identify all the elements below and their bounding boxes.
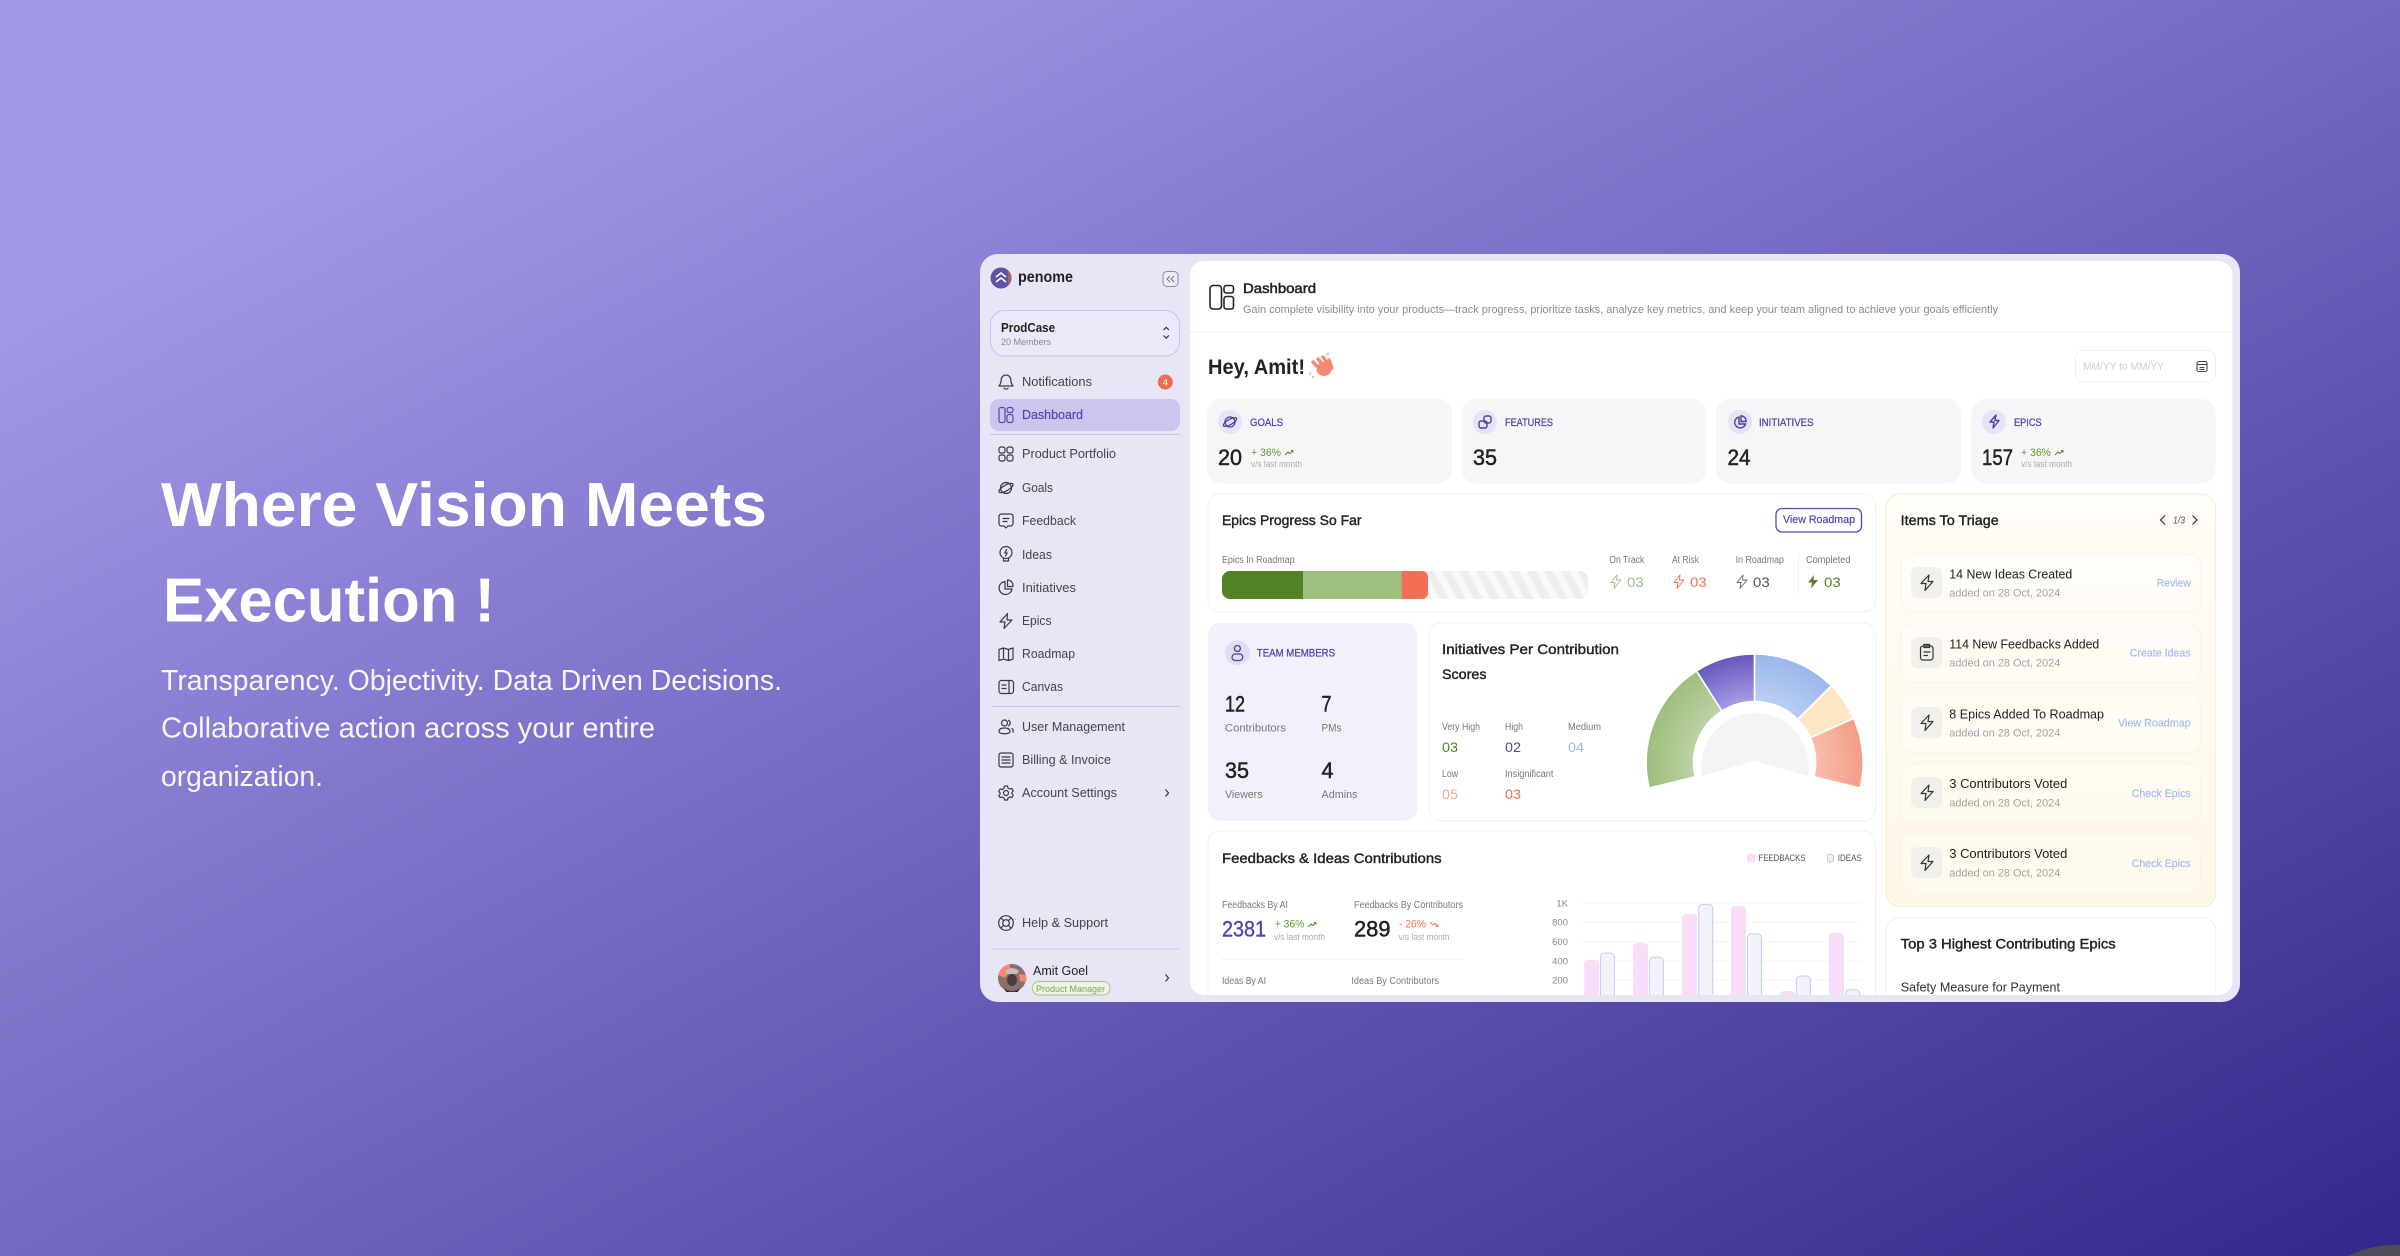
stat card: goals: GOALS bbox=[1250, 417, 1283, 429]
status: in roadmap: 03 bbox=[1753, 574, 1770, 590]
tagline: Collaborative action across your entire bbox=[161, 713, 655, 745]
pagination: 1/3 bbox=[2173, 516, 2185, 526]
y axis: 600 bbox=[1552, 937, 1568, 948]
metric: feedbacks by ai: v/s last month bbox=[1274, 932, 1325, 942]
stat: admins: Admins bbox=[1322, 789, 1358, 801]
tagline: Transparency. Objectivity. Data Driven Decisions. bbox=[161, 665, 782, 697]
legend: medium bbox=[1568, 722, 1600, 752]
nav item: notifications: Notifications bbox=[1022, 374, 1092, 389]
stat: contributors: Contributors bbox=[1225, 723, 1287, 735]
triage item: contributors voted: added on 28 Oct, 2024 bbox=[1949, 798, 2060, 810]
metric: feedbacks by contributors: Feedbacks By Contributors bbox=[1354, 900, 1463, 911]
status: in roadmap bbox=[1736, 555, 1784, 590]
stat: contributors: 12 bbox=[1225, 692, 1245, 717]
stat card: goals: 20 bbox=[1218, 445, 1242, 470]
metric: feedbacks by contributors bbox=[1354, 900, 1463, 942]
panel: team members bbox=[1208, 623, 1417, 821]
user profile: Amit Goel bbox=[1033, 963, 1088, 978]
y axis bbox=[1552, 898, 1862, 986]
triage item: new ideas: Review bbox=[2157, 578, 2191, 590]
stat card: goals: v/s last month bbox=[1251, 459, 1302, 469]
nav item: goals: Goals bbox=[1022, 480, 1053, 495]
stat: pms bbox=[1322, 696, 1342, 732]
panel: feedbacks and ideas bbox=[1208, 830, 1876, 995]
status: at risk: At Risk bbox=[1672, 555, 1700, 566]
status: on track bbox=[1609, 555, 1645, 590]
window frame bbox=[980, 254, 2240, 1002]
greeting: Hey, Amit! bbox=[1208, 356, 1305, 379]
triage item: contributors voted: Check Epics bbox=[2132, 788, 2191, 800]
metric: feedbacks by ai: 2381 bbox=[1222, 917, 1266, 942]
nav item: account settings: Account Settings bbox=[1022, 785, 1117, 800]
nav item: notifications: 4 bbox=[1163, 378, 1168, 388]
stat: viewers bbox=[1225, 762, 1262, 798]
triage item: new feedbacks: 114 New Feedbacks Added bbox=[1949, 637, 2099, 651]
headline bbox=[161, 471, 767, 636]
stat card: epics: 157 bbox=[1982, 445, 2013, 470]
triage item: contributors voted second: 3 Contributors Voted bbox=[1949, 847, 2067, 861]
triage item: contributors voted second: Check Epics bbox=[2132, 858, 2191, 870]
triage item: new ideas bbox=[1901, 554, 2201, 612]
status: at risk bbox=[1672, 555, 1707, 590]
panel: feedbacks and ideas: Feedbacks & Ideas Contributions bbox=[1222, 850, 1442, 866]
panel: items to triage: Items To Triage bbox=[1901, 512, 1999, 528]
stat card: epics: EPICS bbox=[2014, 417, 2042, 429]
legend: low: 05 bbox=[1442, 786, 1458, 802]
nav item: canvas bbox=[999, 679, 1063, 694]
panel: items to triage bbox=[1886, 494, 2216, 907]
icon: features bbox=[1473, 410, 1497, 434]
chart legend: IDEAS bbox=[1838, 853, 1862, 864]
legend: high: High bbox=[1505, 722, 1523, 733]
nav item: canvas: Canvas bbox=[1022, 679, 1063, 694]
nav item: help and support: Help & Support bbox=[1022, 915, 1108, 930]
status: on track: On Track bbox=[1609, 555, 1645, 566]
panel: top contributing epics: Top 3 Highest Contributing Epics bbox=[1901, 935, 2116, 951]
icon: waving hand bbox=[1310, 353, 1332, 378]
icon: goals bbox=[1218, 410, 1242, 434]
legend: very high: 03 bbox=[1442, 739, 1458, 755]
metric: feedbacks by contributors: v/s last month bbox=[1398, 932, 1450, 942]
progress bar bbox=[1222, 571, 1588, 599]
panel: top contributing epics bbox=[1886, 918, 2216, 1018]
stat: contributors bbox=[1226, 696, 1286, 732]
date range picker: MM/YY to MM/YY bbox=[2083, 361, 2165, 373]
panel heading: Initiatives Per Contribution bbox=[1442, 641, 1619, 657]
legend: low: Low bbox=[1442, 769, 1459, 780]
metric: ideas by ai: Ideas By AI bbox=[1222, 976, 1266, 987]
feedback bars bbox=[1584, 906, 1844, 1026]
icon: initiatives bbox=[1728, 410, 1752, 434]
icon: penome logo bbox=[990, 268, 1012, 288]
nav item: product portfolio: Product Portfolio bbox=[1022, 446, 1116, 461]
legend: very high bbox=[1442, 722, 1480, 752]
app window bbox=[980, 254, 2240, 1026]
nav item: initiatives: Initiatives bbox=[1022, 580, 1076, 595]
metric: feedbacks by contributors: - 26% bbox=[1399, 919, 1426, 931]
icon: calendar bbox=[2197, 362, 2207, 372]
user profile: Product Manager bbox=[1036, 984, 1105, 995]
main panel bbox=[1190, 261, 2233, 1026]
y axis: 1K bbox=[1556, 898, 1569, 910]
corner decoration bbox=[2348, 1245, 2400, 1256]
stat card: features bbox=[1462, 399, 1706, 484]
nav item: account settings bbox=[999, 785, 1168, 800]
legend: insignificant: Insignificant bbox=[1505, 769, 1554, 780]
workspace selector bbox=[990, 310, 1180, 356]
metric: feedbacks by ai: Feedbacks By AI bbox=[1222, 900, 1288, 911]
y axis: 400 bbox=[1552, 956, 1568, 968]
bar chart bbox=[1552, 898, 1862, 1026]
panel: initiatives per contribution bbox=[1429, 623, 1876, 821]
avatar bbox=[998, 964, 1026, 992]
triage item: epics added: 8 Epics Added To Roadmap bbox=[1949, 707, 2104, 721]
triage item: epics added: added on 28 Oct, 2024 bbox=[1949, 728, 2060, 740]
stat card: initiatives bbox=[1716, 399, 1961, 484]
headline: Where Vision Meets bbox=[161, 471, 767, 540]
nav item: roadmap: Roadmap bbox=[1022, 646, 1075, 661]
triage item: new ideas: 14 New Ideas Created bbox=[1949, 567, 2072, 581]
nav item: epics: Epics bbox=[1022, 613, 1052, 628]
stat: pms: 7 bbox=[1322, 692, 1332, 717]
chart legend: FEEDBACKS bbox=[1758, 853, 1806, 864]
legend: insignificant bbox=[1506, 770, 1554, 799]
triage item: contributors voted: 3 Contributors Voted bbox=[1949, 777, 2067, 791]
stat card: goals: + 36% bbox=[1251, 447, 1281, 459]
panel: epics progress: Epics Progress So Far bbox=[1222, 512, 1362, 528]
view roadmap button: View Roadmap bbox=[1783, 514, 1855, 526]
date range picker bbox=[2076, 350, 2216, 382]
legend: high bbox=[1506, 722, 1522, 752]
status: on track: 03 bbox=[1627, 574, 1644, 590]
brand name: penome bbox=[1018, 269, 1073, 286]
metric: ideas by contributors: Ideas By Contributors bbox=[1351, 976, 1439, 987]
stat card: epics: v/s last month bbox=[2021, 459, 2072, 469]
legend: insignificant: 03 bbox=[1505, 786, 1521, 802]
triage item: contributors voted second: added on 28 Oct, 2024 bbox=[1949, 868, 2060, 880]
infographic canvas bbox=[161, 254, 2400, 1256]
stat card: features: FEATURES bbox=[1505, 417, 1553, 429]
icon: epics bbox=[1982, 410, 2006, 434]
tagline bbox=[161, 665, 782, 793]
stat card: epics: + 36% bbox=[2021, 447, 2051, 459]
legend: high: 02 bbox=[1505, 739, 1521, 755]
nav item: feedback bbox=[999, 513, 1076, 528]
triage item: new feedbacks: added on 28 Oct, 2024 bbox=[1949, 658, 2060, 670]
sidebar bbox=[990, 268, 1180, 995]
panel: team members: TEAM MEMBERS bbox=[1257, 648, 1335, 660]
stat: viewers: Viewers bbox=[1225, 789, 1263, 801]
page header: Gain complete visibility into your products—track progress, prioritize tasks, analyze key metrics, and keep your team aligned to achieve your goals efficiently bbox=[1243, 304, 1998, 316]
page header bbox=[1210, 280, 1998, 316]
stat card: features: 35 bbox=[1473, 445, 1497, 470]
stat card: initiatives: INITIATIVES bbox=[1759, 417, 1814, 429]
stat: viewers: 35 bbox=[1225, 758, 1249, 783]
status: completed: 03 bbox=[1824, 574, 1841, 590]
icon: team member bbox=[1225, 640, 1250, 665]
tagline: organization. bbox=[161, 761, 323, 793]
panel heading bbox=[1442, 644, 1618, 680]
triage item: new feedbacks: Create Ideas bbox=[2130, 648, 2191, 660]
y axis: 200 bbox=[1552, 976, 1568, 986]
metric: feedbacks by ai bbox=[1222, 900, 1325, 942]
y axis: 800 bbox=[1552, 918, 1568, 928]
workspace selector: 20 Members bbox=[1001, 337, 1051, 348]
triage item: epics added: View Roadmap bbox=[2118, 718, 2191, 730]
nav item: feedback: Feedback bbox=[1022, 513, 1076, 528]
status: in roadmap: In Roadmap bbox=[1736, 555, 1784, 566]
nav item: dashboard active bbox=[990, 399, 1180, 431]
status: at risk: 03 bbox=[1690, 574, 1707, 590]
triage item: epics added bbox=[1901, 694, 2201, 752]
user profile bbox=[998, 963, 1168, 995]
panel: epics progress: Epics In Roadmap bbox=[1222, 555, 1295, 566]
legend: very high: Very High bbox=[1442, 722, 1480, 733]
nav item: epics bbox=[1000, 613, 1052, 628]
legend: low bbox=[1442, 770, 1458, 799]
stat card: goals bbox=[1207, 399, 1452, 484]
gauge chart bbox=[1646, 654, 1863, 788]
nav item: dashboard active: Dashboard bbox=[1022, 407, 1083, 422]
panel heading: Scores bbox=[1442, 666, 1486, 682]
nav item: roadmap bbox=[999, 646, 1075, 661]
panel: top contributing epics: Safety Measure for Payment bbox=[1901, 980, 2060, 995]
legend: medium: 04 bbox=[1568, 739, 1584, 755]
stat: admins bbox=[1322, 762, 1358, 798]
nav item: ideas bbox=[1000, 546, 1052, 562]
status: completed bbox=[1806, 555, 1850, 590]
legend: medium: Medium bbox=[1568, 722, 1601, 733]
page header: Dashboard bbox=[1243, 280, 1316, 296]
stat: pms: PMs bbox=[1322, 723, 1342, 735]
metric: feedbacks by ai: + 36% bbox=[1275, 919, 1305, 931]
view roadmap button bbox=[1776, 508, 1862, 532]
nav item: billing: Billing & Invoice bbox=[1022, 752, 1111, 767]
headline: Execution ! bbox=[163, 567, 495, 636]
icon: dashboard bbox=[1210, 286, 1234, 309]
workspace selector: ProdCase bbox=[1001, 321, 1055, 335]
nav item: user management: User Management bbox=[1022, 719, 1125, 734]
triage item: new ideas: added on 28 Oct, 2024 bbox=[1949, 588, 2060, 600]
icon: collapse button bbox=[1163, 272, 1178, 286]
idea bars bbox=[1600, 904, 1860, 1024]
status: completed: Completed bbox=[1806, 555, 1850, 566]
triage item: contributors voted bbox=[1901, 764, 2201, 822]
metric: feedbacks by contributors: 289 bbox=[1354, 917, 1390, 942]
nav item: goals bbox=[998, 480, 1053, 495]
nav item: notifications bbox=[999, 374, 1173, 390]
triage item: contributors voted second bbox=[1901, 834, 2201, 892]
triage item: new feedbacks bbox=[1901, 624, 2201, 682]
panel: epics progress bbox=[1208, 494, 1876, 612]
chart legend bbox=[1747, 854, 1862, 862]
stat card: epics bbox=[1972, 399, 2216, 484]
stat card: initiatives: 24 bbox=[1728, 445, 1750, 470]
pagination bbox=[2160, 516, 2197, 526]
stat: admins: 4 bbox=[1322, 758, 1334, 783]
nav item: ideas: Ideas bbox=[1022, 547, 1052, 562]
